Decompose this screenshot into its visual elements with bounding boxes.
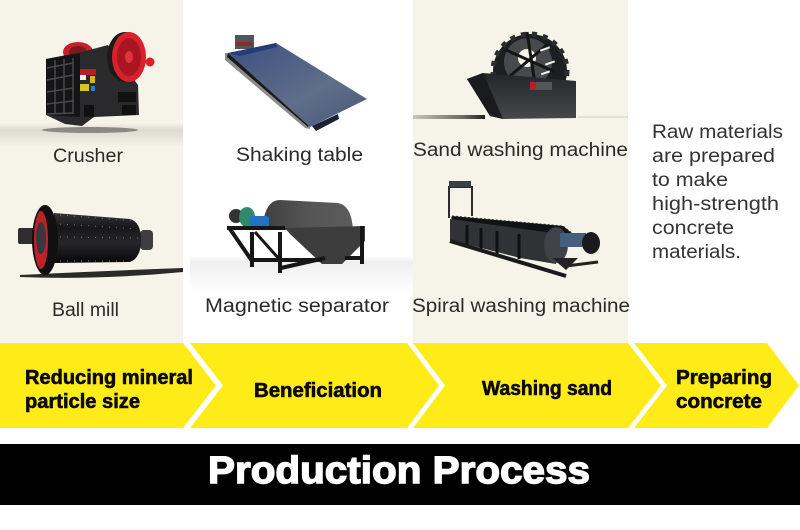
arrow: washing sand [413, 343, 661, 428]
text block: concrete description: concrete [652, 218, 734, 239]
arrow: reducing mineral particle size: Reducing mineral [25, 367, 193, 389]
machine: sand washing machine [413, 32, 628, 119]
machine: ball mill [18, 205, 183, 278]
label: crusher: Crusher [53, 146, 124, 167]
text block: concrete description [652, 122, 783, 263]
arrow: washing sand: Washing sand [482, 378, 612, 400]
arrow: preparing concrete [634, 343, 799, 428]
text block: concrete description: materials. [652, 242, 741, 263]
title banner [0, 444, 800, 505]
text block: concrete description: to make [652, 170, 728, 191]
text block: concrete description: high-strength [652, 194, 779, 215]
label: ball mill: Ball mill [52, 300, 119, 321]
machine: crusher [0, 32, 183, 147]
label: spiral washing machine: Spiral washing machine [412, 296, 630, 317]
machine: shaking table [225, 35, 367, 131]
machine: magnetic separator [190, 200, 413, 293]
label: magnetic separator: Magnetic separator [205, 296, 390, 317]
arrow: preparing concrete: Preparing [676, 367, 772, 389]
label: shaking table: Shaking table [236, 145, 363, 166]
arrow: beneficiation [190, 343, 439, 428]
machine: spiral washing machine [449, 181, 600, 276]
panel: washing sand background [413, 0, 628, 343]
title banner: Production Process [208, 450, 590, 492]
text block: concrete description: Raw materials [652, 122, 783, 143]
label: sand washing machine: Sand washing machine [413, 140, 628, 161]
panel: reducing mineral particle size background [0, 0, 183, 343]
arrow: preparing concrete: concrete [676, 391, 762, 413]
arrow: reducing mineral particle size: particle size [25, 391, 140, 413]
arrow: reducing mineral particle size [0, 343, 216, 428]
text block: concrete description: are prepared [652, 146, 775, 167]
arrow: beneficiation: Beneficiation [254, 380, 382, 402]
